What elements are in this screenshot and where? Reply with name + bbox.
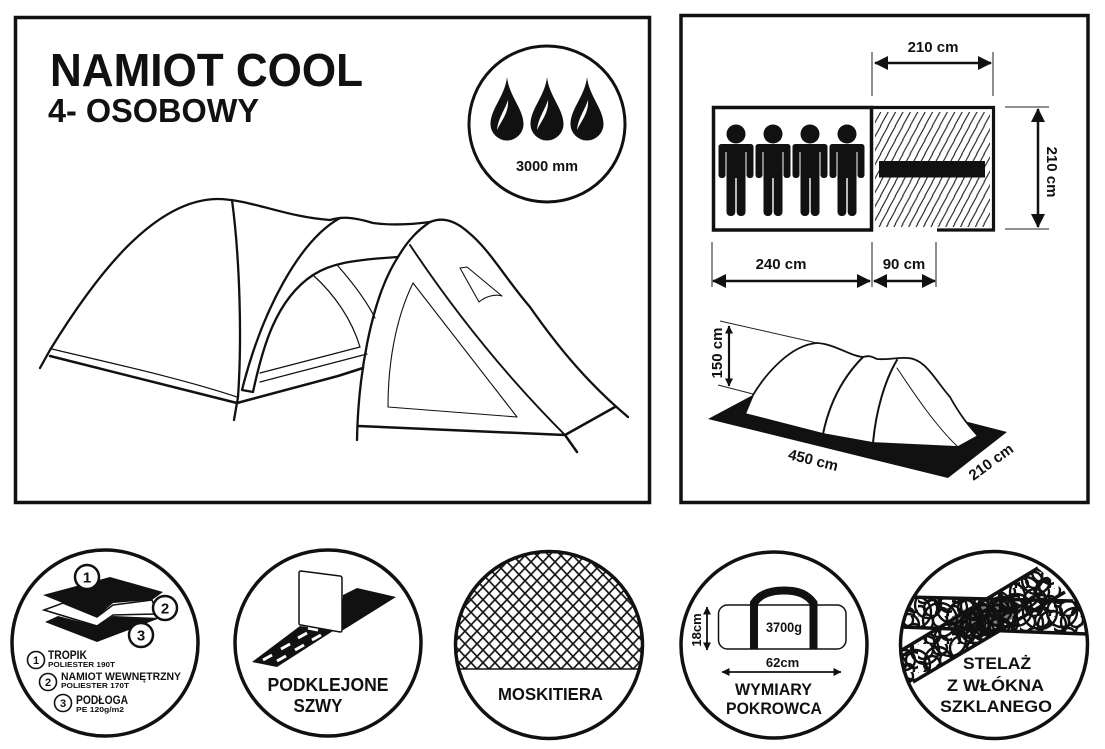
width label: 210 cm <box>966 441 1017 484</box>
legend: tropik: 1 <box>33 655 39 667</box>
inner tent with four persons <box>714 108 872 230</box>
height dimension: 18cm <box>689 613 704 647</box>
height dimension <box>689 607 707 650</box>
tent illustration <box>40 199 628 452</box>
legend: podloga: PODŁOGA <box>76 695 128 707</box>
icon: layers: 3 <box>137 628 145 644</box>
title: 4- OSOBOWY <box>48 92 259 129</box>
dimension: 240 cm and 90 cm: 240 cm <box>756 256 806 273</box>
badge: fiberglass frame: Z WŁÓKNA <box>947 676 1044 695</box>
dimension: 210 cm top: 210 cm <box>908 39 958 56</box>
panel: dimensions panel <box>681 16 1088 502</box>
label: WYMIARY <box>735 680 813 699</box>
legend: tropik <box>28 650 115 669</box>
badge: fiberglass frame: SZKLANEGO <box>940 697 1052 716</box>
badge: mosquito net <box>455 550 643 738</box>
icon: water drops <box>490 77 604 140</box>
tent <box>745 343 978 447</box>
vestibule hatch <box>871 108 994 230</box>
legend: podloga: 3 <box>60 698 66 710</box>
legend: tropik: POLIESTER 190T <box>48 660 115 669</box>
dimension: 240 cm and 90 cm: 90 cm <box>883 256 925 273</box>
width dimension <box>722 655 841 672</box>
icon: carry bag <box>718 590 846 649</box>
floor plan <box>714 108 994 230</box>
badge: taped seams <box>235 550 421 736</box>
height dimension <box>709 321 817 394</box>
legend: podloga: PE 120g/m2 <box>76 705 124 714</box>
title <box>48 44 363 129</box>
icon: layers: 2 <box>161 600 169 618</box>
side view tent with footprint <box>708 321 1017 484</box>
dimension: 240 cm and 90 cm <box>712 242 936 287</box>
length label: 450 cm <box>786 446 840 475</box>
legend: podloga <box>54 694 128 714</box>
badge: taped seams: SZWY <box>294 696 342 716</box>
panel: main tent panel <box>16 18 650 502</box>
dimension: 210 cm top <box>872 39 993 96</box>
badge: bag dimensions <box>681 552 867 738</box>
dimension: 210 cm right <box>1005 107 1060 229</box>
label: PODKLEJONE <box>268 675 388 695</box>
legend: namiot wewnetrzny: POLIESTER 170T <box>61 681 129 690</box>
height dimension: 150 cm <box>709 328 726 378</box>
footprint <box>708 395 1007 478</box>
badge: fiberglass frame <box>895 552 1090 738</box>
dimension: 210 cm right: 210 cm <box>1043 147 1060 197</box>
label: STELAŻ <box>963 654 1031 673</box>
icon: layers: 1 <box>83 570 91 586</box>
rating value: 3000 mm <box>516 158 578 175</box>
legend: namiot wewnetrzny: 2 <box>45 677 51 689</box>
legend: tropik: TROPIK <box>48 650 88 662</box>
icon: layers <box>43 565 177 647</box>
icon: seam tape <box>252 571 396 667</box>
badge: bag dimensions: POKROWCA <box>726 699 822 718</box>
waterproof rating badge <box>469 46 625 202</box>
legend: namiot wewnetrzny: NAMIOT WEWNĘTRZNY <box>61 671 182 683</box>
width dimension: 62cm <box>766 655 799 670</box>
legend: namiot wewnetrzny <box>40 671 182 690</box>
title: NAMIOT COOL <box>50 44 363 96</box>
badge: material layers <box>12 550 198 736</box>
label: MOSKITIERA <box>498 684 603 704</box>
weight: 3700g <box>766 620 802 635</box>
